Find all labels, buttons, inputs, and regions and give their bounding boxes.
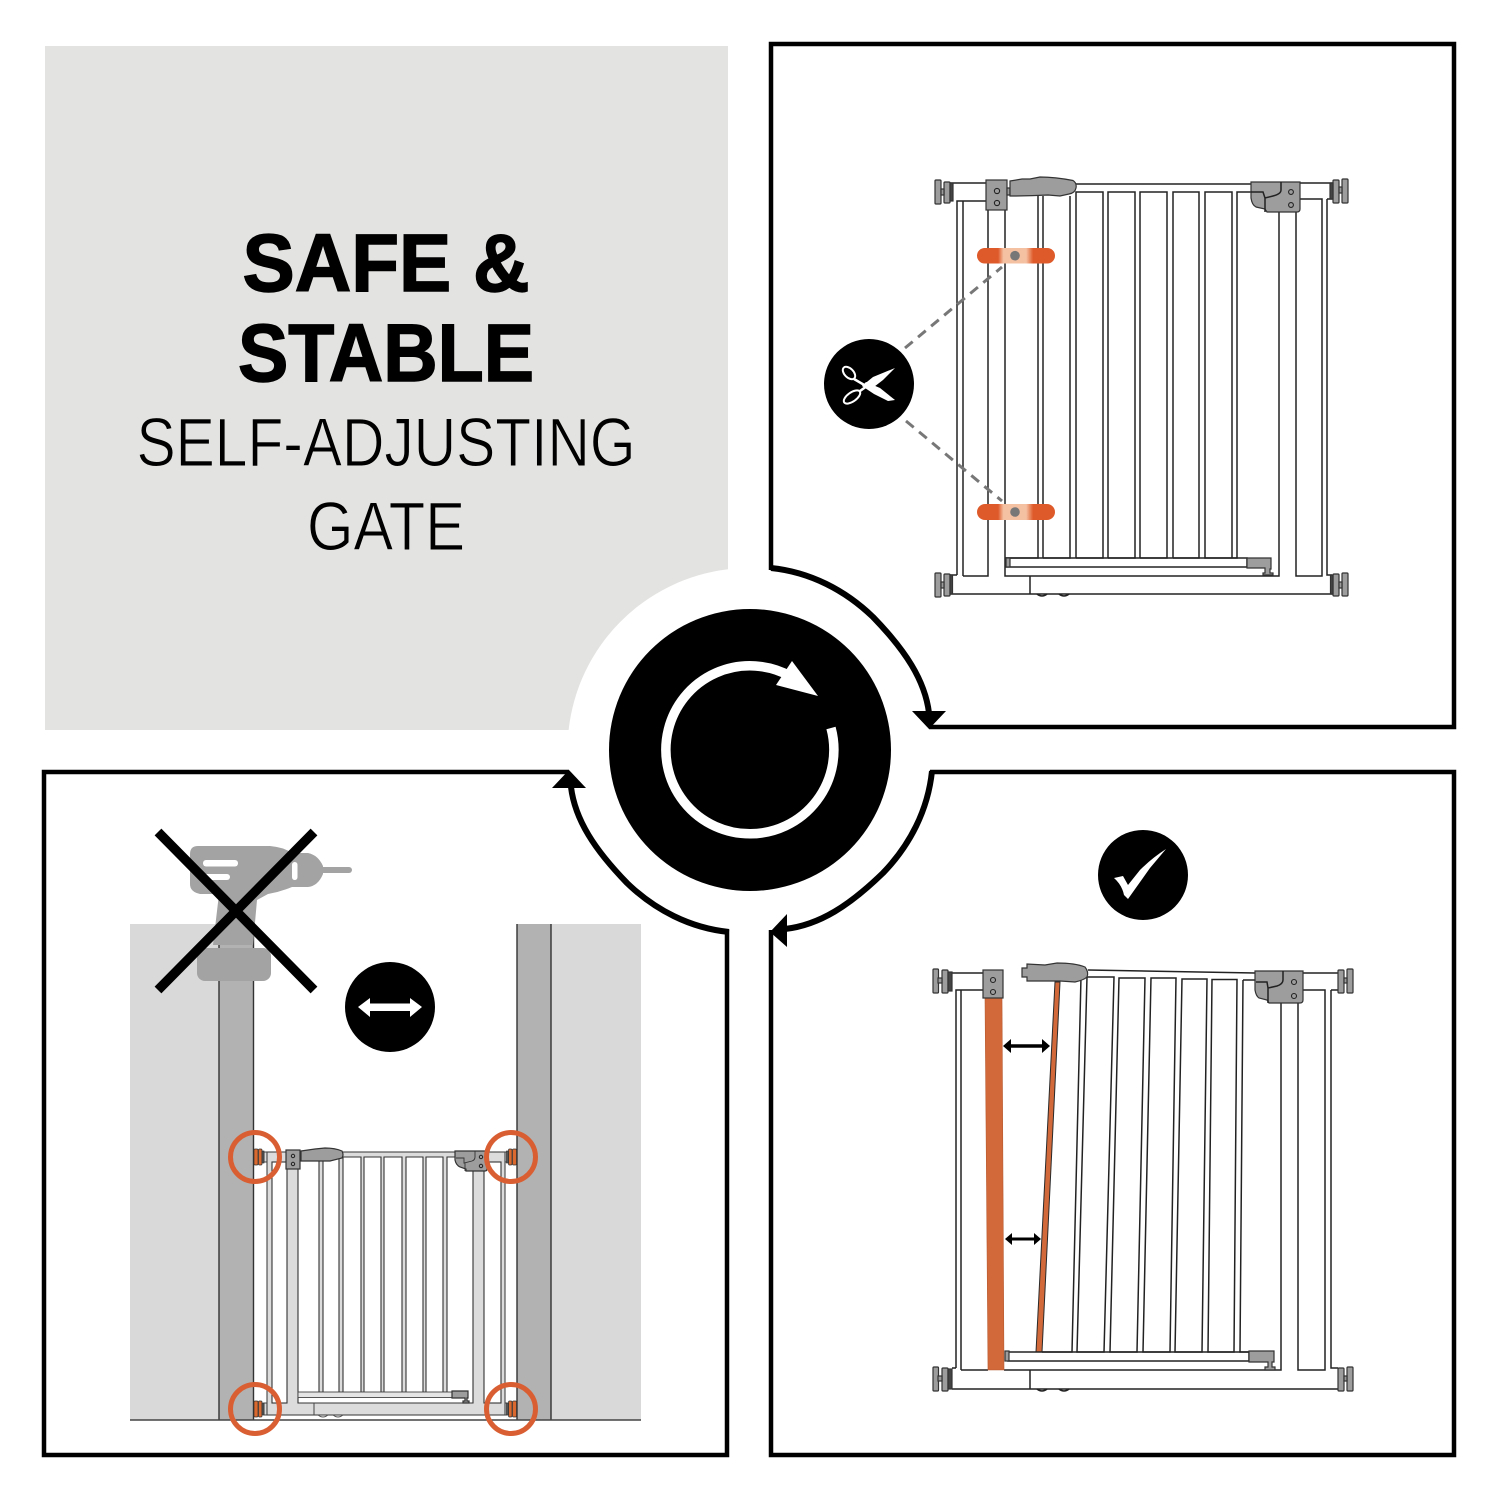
icon: scissors — [824, 339, 914, 429]
arrow: upper gap measure — [1003, 1039, 1050, 1053]
gate: top right — [935, 177, 1348, 597]
highlight circles on four contact points — [230, 1132, 536, 1434]
title: safe and stable, self-adjusting gate: GATE — [307, 488, 465, 565]
arrow: lower gap measure — [1005, 1233, 1041, 1245]
center cycle icon — [609, 609, 891, 891]
title: safe and stable, self-adjusting gate: SELF-ADJUSTING — [136, 404, 636, 481]
panel: title background — [45, 46, 728, 730]
strap: lower orange cable tie — [977, 504, 1055, 520]
title: safe and stable, self-adjusting gate: STABLE — [238, 308, 534, 399]
dashed leader lines from scissors to straps — [905, 267, 1002, 501]
strap: upper orange cable tie — [977, 248, 1055, 264]
panel: top right frame with arrow — [771, 44, 1454, 729]
panel: bottom right frame with arrow — [770, 771, 1454, 1455]
wall: right wall and door frame — [517, 924, 641, 1420]
gate feet: orange wall contact pads — [254, 1149, 516, 1417]
gate: bottom right, door tilted open — [933, 963, 1353, 1391]
gate: bottom left, pressure mounted between walls — [264, 1148, 507, 1417]
panel: bottom left frame with arrow — [44, 770, 729, 1455]
title: safe and stable, self-adjusting gate — [136, 218, 636, 565]
floor line — [130, 1419, 641, 1421]
icon: expansion arrows — [345, 962, 435, 1052]
icon: check mark — [1098, 830, 1188, 920]
title: safe and stable, self-adjusting gate: SAFE & — [242, 218, 530, 309]
orange fixed frame post — [985, 998, 1004, 1370]
icon: drill crossed out — [158, 832, 349, 990]
orange tilted gate slat — [1036, 982, 1060, 1352]
wall: left wall and door frame — [130, 924, 254, 1420]
